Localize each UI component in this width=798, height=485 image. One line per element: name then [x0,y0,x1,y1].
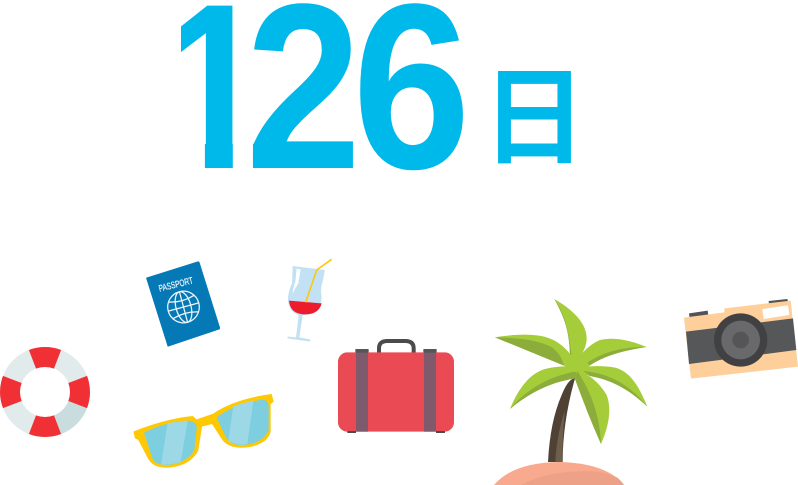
icon: cocktail glass [287,259,332,342]
icon: suitcase [338,341,454,433]
leaves [554,299,587,357]
icon: palm tree on island [494,299,647,485]
title: 126 days [140,0,586,219]
camera body [684,301,798,379]
trunk [548,378,575,462]
passport label: PASSPORT [158,275,194,295]
icon: life ring [10,357,80,427]
icon: camera [684,299,798,379]
unit: day: 日 [482,60,586,178]
icon: sunglasses [133,394,274,468]
suitcase handle [379,341,414,353]
passport globe [164,288,203,326]
suitcase body [338,352,454,432]
icon: passport [146,261,220,347]
camera lens [714,313,767,367]
island [494,462,624,485]
